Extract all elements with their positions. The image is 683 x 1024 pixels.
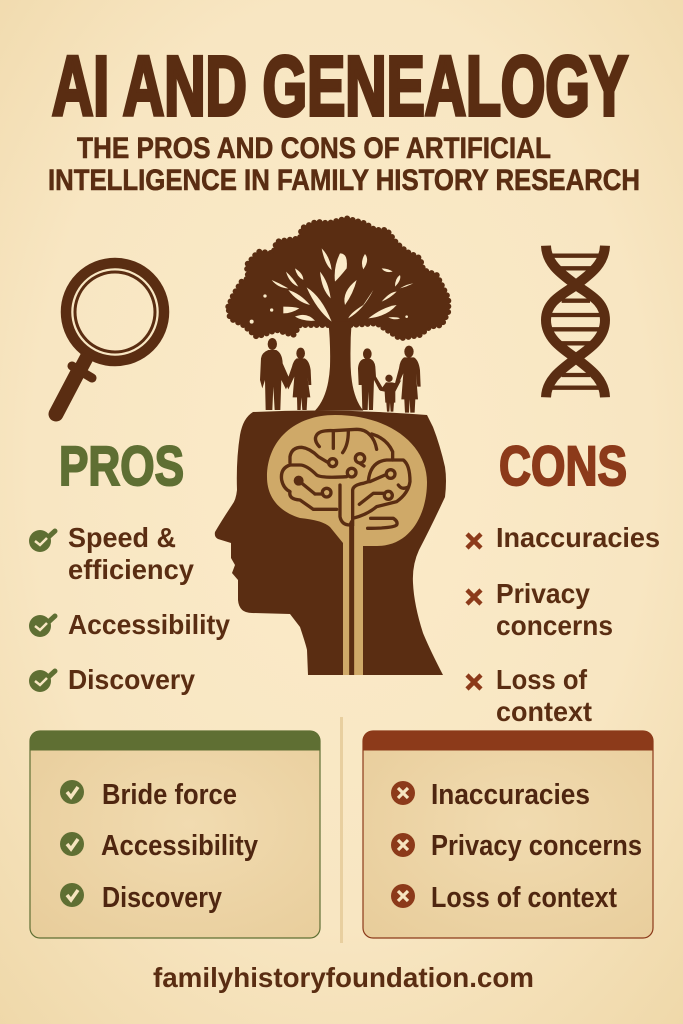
- tree: [228, 218, 448, 411]
- pros item 1: efficiency: [68, 554, 194, 585]
- list: cons: [467, 522, 660, 727]
- subtitle: [48, 132, 640, 197]
- pros item 1: [29, 522, 194, 585]
- pros panel rows: [60, 779, 258, 914]
- icon: magnifying glass: [56, 263, 164, 414]
- cons item 3: Loss of: [496, 664, 588, 695]
- pros panel rows: Accessibility: [101, 830, 258, 862]
- subtitle: THE PROS AND CONS OF ARTIFICIAL: [77, 132, 551, 165]
- cons item 3: context: [496, 696, 592, 727]
- pros panel rows: Discovery: [102, 882, 222, 914]
- cons item 2: concerns: [496, 610, 613, 641]
- pros item 2: Accessibility: [68, 609, 230, 640]
- footer url: familyhistoryfoundation.com: [153, 962, 534, 993]
- cons panel rows: [391, 779, 642, 914]
- heading: pros: PROS: [59, 434, 184, 497]
- circuit brain: [281, 429, 410, 675]
- icon: DNA helix: [546, 246, 605, 397]
- cons panel rows: Loss of context: [431, 882, 617, 914]
- cons item 2: [467, 578, 613, 641]
- cons item 1: Inaccuracies: [496, 522, 660, 553]
- canopy gaps: [250, 248, 413, 324]
- pros item 1: Speed &: [68, 522, 176, 553]
- panel: cons: [363, 731, 653, 938]
- pros item 3: Discovery: [68, 664, 195, 695]
- pros panel rows: Bride force: [102, 779, 237, 811]
- head silhouette: [215, 411, 446, 675]
- cons panel rows: Privacy concerns: [431, 830, 642, 862]
- brain area: [267, 415, 427, 675]
- heading: cons: CONS: [499, 434, 627, 497]
- cons panel rows: Inaccuracies: [431, 779, 590, 811]
- family silhouettes: [260, 338, 421, 413]
- list: pros: [29, 522, 230, 695]
- trunk: [315, 322, 363, 411]
- cons item 2: Privacy: [496, 578, 590, 609]
- panel: pros: [30, 731, 320, 938]
- cons item 3: [467, 664, 592, 727]
- illustration: family tree: [215, 218, 448, 675]
